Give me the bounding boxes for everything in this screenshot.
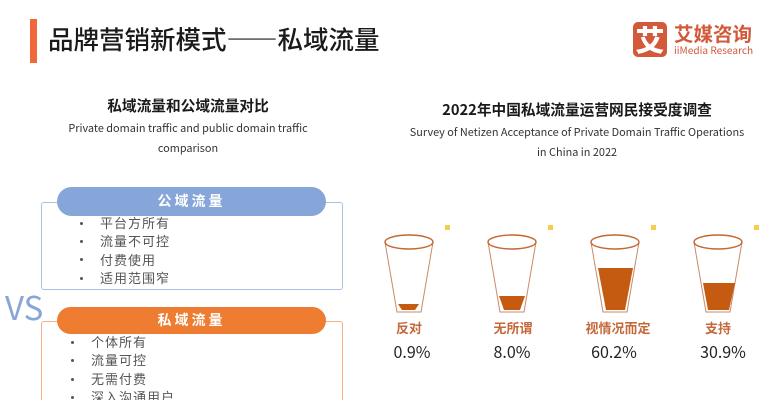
VS label: VS [5, 282, 43, 330]
list [71, 332, 175, 400]
list: 无需付费 [91, 369, 147, 388]
list: 平台方所有 [100, 213, 170, 232]
right subtitle [410, 124, 744, 160]
right heading: 2022年中国私域流量运营网民接受度调查 [442, 99, 712, 120]
pill heading [57, 307, 326, 334]
cup chart [384, 225, 759, 312]
pill heading: 私域流量 [158, 310, 226, 330]
label: against: 反对 [396, 318, 422, 337]
panel: public domain traffic [41, 187, 343, 290]
right subtitle: in China in 2022 [537, 144, 617, 160]
panel: private domain traffic [41, 307, 343, 400]
value: depends on situation: 60.2% [591, 339, 637, 363]
list: 适用范围窄 [100, 268, 170, 287]
title: 品牌营销新模式——私域流量 [48, 20, 380, 57]
panel outline [41, 202, 343, 290]
left subtitle: Private domain traffic and public domain traffic [68, 120, 308, 136]
right subtitle: Survey of Netizen Acceptance of Private Domain Traffic Operations [410, 124, 744, 140]
list: 个体所有 [91, 332, 147, 351]
label: support: 支持 [705, 318, 731, 337]
logo: iiMedia Research [633, 18, 753, 60]
panel outline [41, 321, 343, 400]
logo Chinese name: 艾媒咨询 [674, 18, 752, 47]
list: 流量可控 [91, 350, 147, 369]
value: indifferent: 8.0% [494, 339, 530, 363]
label: indifferent: 无所谓 [493, 318, 532, 337]
list: 付费使用 [100, 250, 156, 269]
value: against: 0.9% [394, 339, 430, 363]
title accent bar [30, 19, 37, 63]
pill heading [57, 187, 326, 216]
list [80, 213, 170, 287]
left subtitle: comparison [158, 140, 218, 156]
list: 流量不可控 [100, 231, 170, 250]
left heading: 私域流量和公域流量对比 [107, 95, 269, 116]
cup: depends 60.2% [591, 225, 656, 312]
cup: against 0.9% [385, 225, 450, 312]
left subtitle [68, 120, 308, 156]
pill heading: 公域流量 [158, 191, 226, 211]
cup: indifferent 8.0% [488, 225, 553, 312]
cup: support 30.9% [694, 225, 759, 312]
label: depends on situation: 视情况而定 [585, 318, 650, 337]
value: support: 30.9% [700, 339, 746, 363]
logo English name: iiMedia Research [674, 42, 753, 57]
logo icon: 艾 [635, 18, 664, 60]
